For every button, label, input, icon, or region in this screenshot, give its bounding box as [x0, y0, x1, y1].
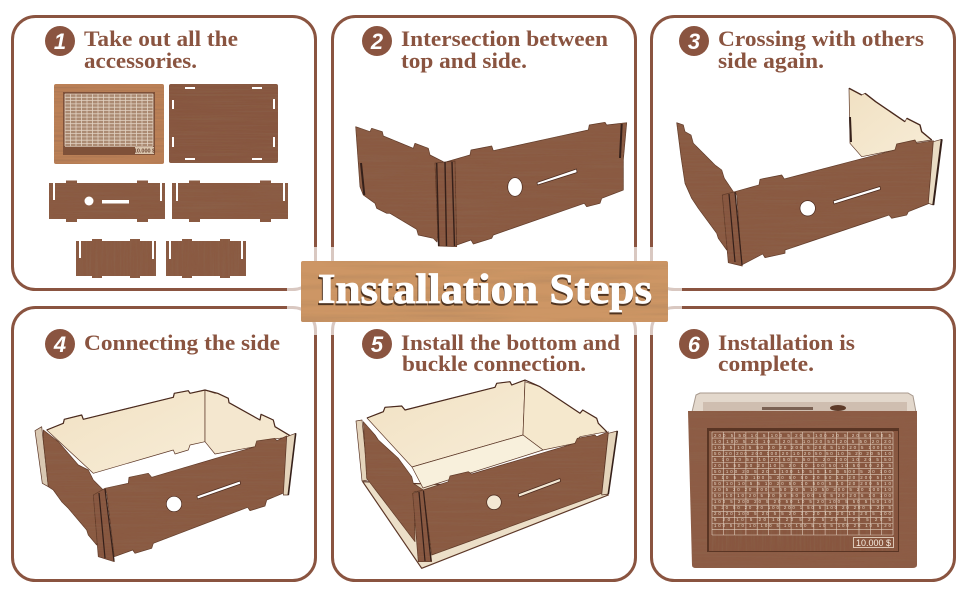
savings grid: [712, 432, 893, 535]
front board with grid: 10.000 $: [134, 148, 155, 154]
step 1 badge: [45, 26, 75, 56]
savings grid: 5 20 10 5 20 10 20 5 20 5 20 5 20 5 20 5: [714, 517, 892, 522]
step 6 badge: 6: [688, 332, 701, 357]
step 6 heading: complete.: [718, 351, 814, 376]
panel: step 4: [35, 329, 296, 562]
panel: step 6: [679, 329, 917, 568]
illustration: two joined walls: [356, 122, 627, 247]
savings grid: 20 5 50 50 20 10 5 20 10 100 50 10 50 50 20 5: [714, 463, 892, 468]
step 4 badge: [45, 329, 75, 359]
step 5 badge: 5: [371, 332, 384, 357]
savings grid: 100 5 10 5 50 20 20 200 5 200 5 10 20 5 100 50: [714, 445, 892, 450]
short side board: [166, 239, 246, 278]
title plank: Installation Steps: [301, 261, 668, 322]
step 1 heading: Take out all the: [84, 26, 238, 51]
savings grid: 50 10 10 20 5 20 50 50 100 10 5 20 20 5 10 100: [714, 493, 892, 498]
step 6 badge: [679, 329, 709, 359]
savings grid: 5 10 5 50 100 5 20 50 50 20 50 10 20 200 5 10: [714, 475, 892, 480]
panel: step 5: [356, 329, 620, 568]
title plank: Installation Steps: Installation Steps: [318, 267, 652, 313]
top board with slots: [169, 84, 278, 163]
savings grid: 5 20 50 20 20 100 200 1 50 5 100 20 200 5 20 5: [714, 505, 892, 510]
step 2 heading: top and side.: [401, 48, 527, 73]
step 4 badge: 4: [53, 332, 66, 357]
savings grid: 50 100 20 5 20 5 100 10 5 5 10 5 500 5 20 100: [714, 469, 892, 474]
step 3 heading: side again.: [718, 48, 824, 73]
step 1 heading: accessories.: [84, 48, 197, 73]
savings grid: 50 20 200 200 100 20 10 20 50 50 10 5 20 20 5 10: [714, 451, 892, 456]
illustration: open four-sided box: [35, 390, 296, 562]
savings grid: 20 5 20 20 200 5 50 20 5 10 50 200 5 20 100 10: [714, 487, 892, 492]
title plank: Installation Steps: Installation Steps: [317, 269, 652, 315]
long side board: [172, 180, 288, 222]
savings grid: 100 5 20 10 100 5 10 100 5 10 5 100 20 10 5 20: [714, 523, 892, 528]
savings grid: 10 100 5 20 10 5 20 5 10 20 50 20 5 50 20 20: [714, 439, 892, 444]
step 5 heading: Install the bottom and: [401, 330, 620, 355]
long side board with coin hole: [49, 180, 165, 222]
illustration: finished money box: [688, 393, 917, 568]
savings grid: 20 20 100 5 20 5 5 20 20 20 10 20 10 20 5 100: [714, 511, 892, 516]
step 3 heading: Crossing with others: [718, 26, 924, 51]
step 4 heading: Connecting the side: [84, 330, 280, 355]
step 2 badge: [362, 26, 392, 56]
illustration: three joined walls: [677, 88, 942, 266]
front board with grid: [54, 84, 164, 164]
savings grid: 200 5 50 10 5 100 5 20 5 100 20 5 20 50 50 5: [714, 433, 892, 438]
panel: step 2: [356, 26, 627, 247]
step 2 heading: Intersection between: [401, 26, 608, 51]
savings grid: 100 5 200 20 5 20 50 10 5 20 100 5 50 5 50 10: [714, 499, 892, 504]
savings grid: 5 10 20 50 10 20 50 5 50 5 20 200 10 20 5 50: [714, 457, 892, 462]
step 3 badge: [679, 26, 709, 56]
step 5 badge: [362, 329, 392, 359]
panel: step 1: [45, 26, 288, 278]
step 5 heading: buckle connection.: [402, 351, 586, 376]
step 2 badge: 2: [370, 29, 384, 54]
total label 10.000 $: 10.000 $: [856, 538, 891, 548]
savings grid: 50 10 10 5 5 10 20 50 10 500 5 10 20 200 5 10: [714, 481, 892, 486]
short side board: [76, 239, 156, 278]
step 3 badge: 3: [688, 29, 700, 54]
step 6 heading: Installation is: [718, 330, 855, 355]
step 1 badge: 1: [54, 29, 66, 54]
illustration: box with bottom installed: [356, 380, 617, 568]
panel: step 3: [677, 26, 942, 266]
